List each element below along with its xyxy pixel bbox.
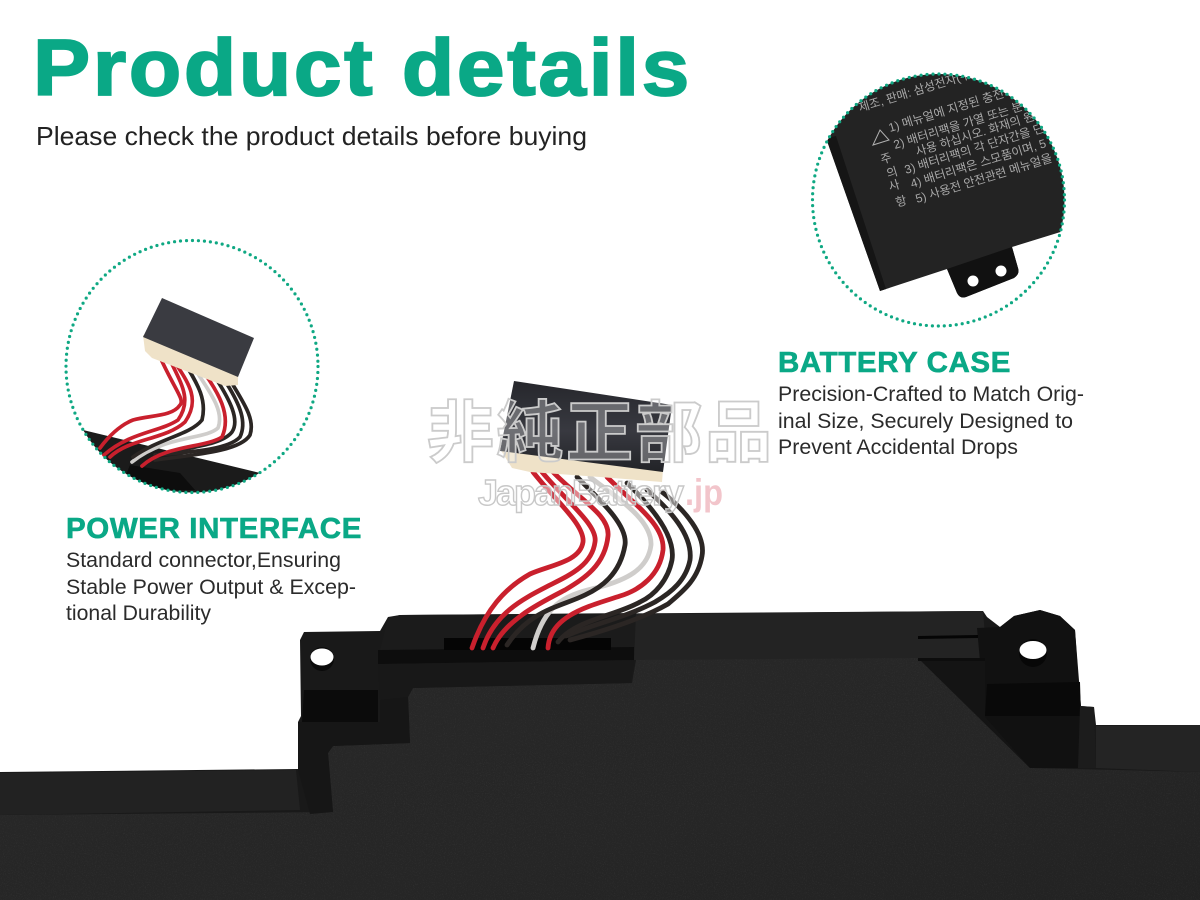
text block: battery case description (778, 383, 1084, 459)
panel: power interface circle (66, 240, 318, 500)
label text: 사 (887, 177, 901, 194)
connector in circle (143, 298, 254, 386)
text block: power interface description: tional Durability (66, 602, 211, 625)
dotted ring (66, 240, 318, 492)
text block: power interface description: Stable Power Output & Excep- (66, 576, 356, 599)
connector slot (444, 638, 611, 650)
right corner block (977, 610, 1081, 768)
label text: 주 (879, 150, 893, 167)
wires in circle (100, 357, 251, 466)
title: Product details (33, 23, 692, 112)
frame: left tab and step (298, 666, 410, 814)
text block: power interface description: Standard connector,Ensuring (66, 549, 341, 572)
label text: 4) 배터리팩은 스모품이며, 5 (909, 136, 1048, 191)
label text: 2) 배터리팩을 가열 또는 분해 (892, 96, 1035, 152)
heading: power interface: POWER INTERFACE (66, 513, 362, 545)
battery body (0, 610, 1200, 900)
left strip (0, 770, 300, 815)
connector housing (378, 613, 636, 664)
label text (858, 75, 1052, 207)
battery edge in circle (84, 430, 259, 492)
main connector plug (500, 381, 672, 482)
subtitle: Please check the product details before buying (36, 121, 587, 151)
label text: 사용 하십시오. 화재의 원인 (914, 106, 1047, 159)
panel speckle (0, 650, 1200, 900)
label text: 1) 메뉴얼에 지정된 충전기 (887, 83, 1016, 135)
watermark: JapanBattery (478, 472, 684, 513)
dotted ring (812, 74, 1064, 326)
top strip (630, 611, 987, 660)
mounting hole right (1019, 639, 1047, 667)
right strip (1096, 725, 1200, 772)
textured main panel (0, 658, 1200, 900)
watermark: .jp (685, 472, 723, 513)
label text: 제조, 판매: 삼성전자(주) (857, 66, 976, 115)
text block: battery case description: Precision-Crafted to Match Orig- (778, 383, 1084, 406)
text block: power interface description (66, 549, 356, 625)
panel: battery case circle (812, 60, 1070, 326)
label text: 5) 사용전 안전관련 메뉴얼을 (914, 151, 1054, 206)
label text: 3) 배터리팩의 각 단자간을 단락 (903, 118, 1057, 177)
frame below housing (378, 660, 634, 700)
text block: battery case description: inal Size, Securely Designed to (778, 410, 1073, 433)
watermark (427, 396, 772, 513)
main wire bundle (472, 472, 702, 648)
warning triangle (873, 130, 889, 145)
mounting hole left (310, 647, 334, 671)
heading: battery case: BATTERY CASE (778, 347, 1011, 379)
battery case shape (826, 60, 1070, 298)
label text: 항 (894, 193, 908, 210)
watermark: 非純正部品 (427, 396, 772, 471)
label text: 의 (885, 164, 899, 181)
text block: battery case description: Prevent Accidental Drops (778, 436, 1018, 459)
